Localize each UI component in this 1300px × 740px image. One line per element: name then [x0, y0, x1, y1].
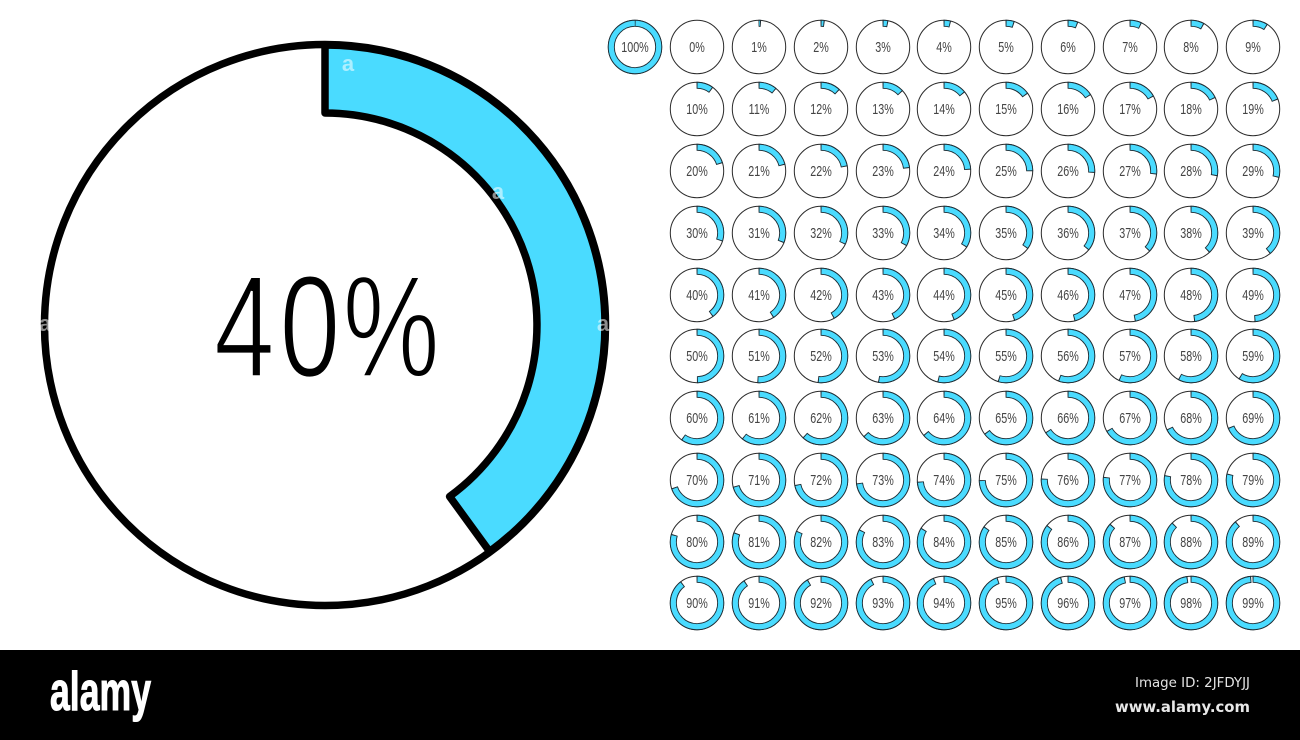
gauge 38%	[1164, 206, 1218, 260]
gauge 6%: 6%	[1060, 39, 1076, 56]
gauge 45%	[979, 268, 1033, 322]
gauge grid 0 to 100 percent	[608, 20, 1280, 630]
gauge 6%	[1041, 20, 1095, 74]
gauge 34%	[917, 206, 971, 260]
gauge 49%	[1226, 268, 1280, 322]
gauge 40%	[670, 268, 724, 322]
gauge 94%: 94%	[933, 595, 955, 612]
gauge 55%	[979, 329, 1033, 383]
gauge 93%: 93%	[872, 595, 894, 612]
gauge 60%: 60%	[686, 410, 708, 427]
gauge 36%	[1041, 206, 1095, 260]
gauge 84%: 84%	[933, 534, 955, 551]
gauge 90%	[670, 576, 724, 630]
gauge 71%	[732, 453, 786, 507]
gauge 50%	[670, 329, 724, 383]
gauge 22%	[794, 144, 848, 198]
gauge 16%: 16%	[1057, 101, 1079, 118]
gauge 3%	[856, 20, 910, 74]
gauge 69%: 69%	[1242, 410, 1264, 427]
gauge 85%: 85%	[995, 534, 1017, 551]
gauge 19%	[1226, 82, 1280, 136]
gauge 40%: 40%	[686, 287, 708, 304]
website url: www.alamy.com	[1115, 698, 1250, 716]
gauge 75%	[979, 453, 1033, 507]
gauge 76%: 76%	[1057, 472, 1079, 489]
gauge 5%	[979, 20, 1033, 74]
gauge 89%	[1226, 515, 1280, 569]
gauge 58%: 58%	[1180, 348, 1202, 365]
gauge 12%	[794, 82, 848, 136]
gauge 43%: 43%	[872, 287, 894, 304]
faint watermark marks on large gauge: a	[39, 311, 52, 336]
gauge 32%: 32%	[810, 225, 832, 242]
gauge 21%: 21%	[748, 163, 770, 180]
gauge 12%: 12%	[810, 101, 832, 118]
gauge 49%: 49%	[1242, 287, 1264, 304]
gauge 29%	[1226, 144, 1280, 198]
gauge 50%: 50%	[686, 348, 708, 365]
gauge 47%: 47%	[1119, 287, 1141, 304]
faint watermark marks on large gauge: a	[492, 179, 505, 204]
gauge 48%	[1164, 268, 1218, 322]
image id: Image ID: 2JFDYJJ	[1135, 675, 1250, 691]
gauge 91%	[732, 576, 786, 630]
gauge 64%	[917, 391, 971, 445]
gauge 22%: 22%	[810, 163, 832, 180]
gauge 45%: 45%	[995, 287, 1017, 304]
gauge 25%	[979, 144, 1033, 198]
gauge 2%	[794, 20, 848, 74]
gauge 31%: 31%	[748, 225, 770, 242]
gauge 37%	[1103, 206, 1157, 260]
gauge 27%	[1103, 144, 1157, 198]
gauge 11%	[732, 82, 786, 136]
gauge 99%: 99%	[1242, 595, 1264, 612]
gauge 82%: 82%	[810, 534, 832, 551]
gauge 37%: 37%	[1119, 225, 1141, 242]
gauge 42%: 42%	[810, 287, 832, 304]
gauge 51%	[732, 329, 786, 383]
gauge 72%: 72%	[810, 472, 832, 489]
gauge 80%: 80%	[686, 534, 708, 551]
gauge 9%: 9%	[1245, 39, 1261, 56]
gauge 67%	[1103, 391, 1157, 445]
large gauge label: 40%	[214, 246, 440, 408]
gauge 83%: 83%	[872, 534, 894, 551]
gauge 55%: 55%	[995, 348, 1017, 365]
gauge 54%	[917, 329, 971, 383]
large gauge showing 40%	[39, 44, 610, 606]
gauge 97%	[1103, 576, 1157, 630]
gauge 61%: 61%	[748, 410, 770, 427]
gauge 8%: 8%	[1183, 39, 1199, 56]
gauge 69%	[1226, 391, 1280, 445]
gauge 65%: 65%	[995, 410, 1017, 427]
gauge 18%	[1164, 82, 1218, 136]
footer bar	[0, 650, 1300, 740]
gauge 77%: 77%	[1119, 472, 1141, 489]
gauge 93%	[856, 576, 910, 630]
gauge 77%	[1103, 453, 1157, 507]
gauge 46%: 46%	[1057, 287, 1079, 304]
gauge 84%	[917, 515, 971, 569]
gauge 18%: 18%	[1180, 101, 1202, 118]
gauge 17%: 17%	[1119, 101, 1141, 118]
gauge 30%	[670, 206, 724, 260]
gauge 59%: 59%	[1242, 348, 1264, 365]
gauge 41%	[732, 268, 786, 322]
gauge 4%	[917, 20, 971, 74]
gauge 52%: 52%	[810, 348, 832, 365]
gauge 51%: 51%	[748, 348, 770, 365]
gauge 88%	[1164, 515, 1218, 569]
gauge 63%: 63%	[872, 410, 894, 427]
gauge 56%: 56%	[1057, 348, 1079, 365]
gauge 25%: 25%	[995, 163, 1017, 180]
gauge 98%	[1164, 576, 1218, 630]
gauge 74%	[917, 453, 971, 507]
gauge 23%	[856, 144, 910, 198]
gauge 73%	[856, 453, 910, 507]
gauge 13%: 13%	[872, 101, 894, 118]
gauge 66%	[1041, 391, 1095, 445]
gauge 73%: 73%	[872, 472, 894, 489]
gauge 78%: 78%	[1180, 472, 1202, 489]
gauge 39%: 39%	[1242, 225, 1264, 242]
gauge 80%	[670, 515, 724, 569]
gauge 72%	[794, 453, 848, 507]
gauge 11%: 11%	[749, 101, 769, 118]
gauge 78%	[1164, 453, 1218, 507]
gauge 23%: 23%	[872, 163, 894, 180]
gauge 36%: 36%	[1057, 225, 1079, 242]
gauge 3%: 3%	[875, 39, 891, 56]
gauge 88%: 88%	[1180, 534, 1202, 551]
gauge 20%: 20%	[686, 163, 708, 180]
gauge 85%	[979, 515, 1033, 569]
gauge 21%	[732, 144, 786, 198]
gauge 97%: 97%	[1119, 595, 1141, 612]
gauge 9%	[1226, 20, 1280, 74]
gauge 47%	[1103, 268, 1157, 322]
gauge 15%	[979, 82, 1033, 136]
gauge 61%	[732, 391, 786, 445]
gauge 35%: 35%	[995, 225, 1017, 242]
gauge 26%	[1041, 144, 1095, 198]
gauge 38%: 38%	[1180, 225, 1202, 242]
gauge 57%: 57%	[1119, 348, 1141, 365]
gauge 24%	[917, 144, 971, 198]
gauge 2%: 2%	[813, 39, 829, 56]
gauge 10%	[670, 82, 724, 136]
gauge 100%: 100%	[621, 39, 649, 56]
gauge 71%: 71%	[748, 472, 770, 489]
gauge 14%	[917, 82, 971, 136]
gauge 5%: 5%	[998, 39, 1014, 56]
gauge 1%: 1%	[751, 39, 767, 56]
gauge 89%: 89%	[1242, 534, 1264, 551]
gauge 67%: 67%	[1119, 410, 1141, 427]
gauge 14%: 14%	[933, 101, 955, 118]
gauge 28%	[1164, 144, 1218, 198]
gauge 10%: 10%	[686, 101, 708, 118]
gauge 65%	[979, 391, 1033, 445]
gauge 86%	[1041, 515, 1095, 569]
gauge 63%	[856, 391, 910, 445]
gauge 29%: 29%	[1242, 163, 1264, 180]
gauge 90%: 90%	[686, 595, 708, 612]
gauge 79%: 79%	[1242, 472, 1264, 489]
gauge 81%: 81%	[748, 534, 770, 551]
gauge 86%: 86%	[1057, 534, 1079, 551]
gauge 74%: 74%	[933, 472, 955, 489]
gauge 100%	[608, 20, 662, 74]
gauge 79%	[1226, 453, 1280, 507]
gauge 87%	[1103, 515, 1157, 569]
gauge 68%	[1164, 391, 1218, 445]
gauge 82%	[794, 515, 848, 569]
gauge 52%	[794, 329, 848, 383]
gauge 91%: 91%	[748, 595, 770, 612]
gauge 32%	[794, 206, 848, 260]
gauge 99%	[1226, 576, 1280, 630]
gauge 98%: 98%	[1180, 595, 1202, 612]
gauge 0%	[670, 20, 724, 74]
gauge 34%: 34%	[933, 225, 955, 242]
gauge 75%: 75%	[995, 472, 1017, 489]
gauge 44%	[917, 268, 971, 322]
gauge 35%	[979, 206, 1033, 260]
gauge 1%	[732, 20, 786, 74]
gauge 24%: 24%	[933, 163, 955, 180]
gauge 92%: 92%	[810, 595, 832, 612]
gauge 66%: 66%	[1057, 410, 1079, 427]
gauge 59%	[1226, 329, 1280, 383]
gauge 64%: 64%	[933, 410, 955, 427]
gauge 43%	[856, 268, 910, 322]
gauge 31%	[732, 206, 786, 260]
gauge 39%	[1226, 206, 1280, 260]
gauge 48%: 48%	[1180, 287, 1202, 304]
gauge 56%	[1041, 329, 1095, 383]
gauge 62%: 62%	[810, 410, 832, 427]
faint watermark marks on large gauge	[39, 51, 610, 336]
faint watermark marks on large gauge: a	[597, 311, 610, 336]
gauge 87%: 87%	[1119, 534, 1141, 551]
gauge 94%	[917, 576, 971, 630]
gauge 58%	[1164, 329, 1218, 383]
gauge 53%	[856, 329, 910, 383]
gauge 15%: 15%	[995, 101, 1017, 118]
gauge 41%: 41%	[748, 287, 770, 304]
gauge 27%: 27%	[1119, 163, 1141, 180]
gauge 92%	[794, 576, 848, 630]
gauge 8%	[1164, 20, 1218, 74]
gauge 95%: 95%	[995, 595, 1017, 612]
gauge 42%	[794, 268, 848, 322]
gauge 53%: 53%	[872, 348, 894, 365]
gauge 44%: 44%	[933, 287, 955, 304]
gauge 19%: 19%	[1242, 101, 1264, 118]
gauge 96%	[1041, 576, 1095, 630]
gauge 95%	[979, 576, 1033, 630]
gauge 70%	[670, 453, 724, 507]
gauge 28%: 28%	[1180, 163, 1202, 180]
gauge 70%: 70%	[686, 472, 708, 489]
large gauge cyan arc	[325, 45, 605, 552]
gauge 16%	[1041, 82, 1095, 136]
gauge 30%: 30%	[686, 225, 708, 242]
gauge 7%: 7%	[1122, 39, 1138, 56]
gauge 33%: 33%	[872, 225, 894, 242]
gauge 33%	[856, 206, 910, 260]
gauge 62%	[794, 391, 848, 445]
gauge 13%	[856, 82, 910, 136]
faint watermark marks on large gauge: a	[342, 51, 355, 76]
gauge 83%	[856, 515, 910, 569]
gauge 26%: 26%	[1057, 163, 1079, 180]
gauge 20%	[670, 144, 724, 198]
gauge 76%	[1041, 453, 1095, 507]
gauge 4%: 4%	[936, 39, 952, 56]
gauge 81%	[732, 515, 786, 569]
gauge 17%	[1103, 82, 1157, 136]
alamy logo: alamy	[50, 660, 151, 722]
gauge 68%: 68%	[1180, 410, 1202, 427]
gauge 60%	[670, 391, 724, 445]
gauge 0%: 0%	[689, 39, 705, 56]
gauge 96%: 96%	[1057, 595, 1079, 612]
gauge 7%	[1103, 20, 1157, 74]
gauge 57%	[1103, 329, 1157, 383]
gauge 54%: 54%	[933, 348, 955, 365]
gauge 46%	[1041, 268, 1095, 322]
